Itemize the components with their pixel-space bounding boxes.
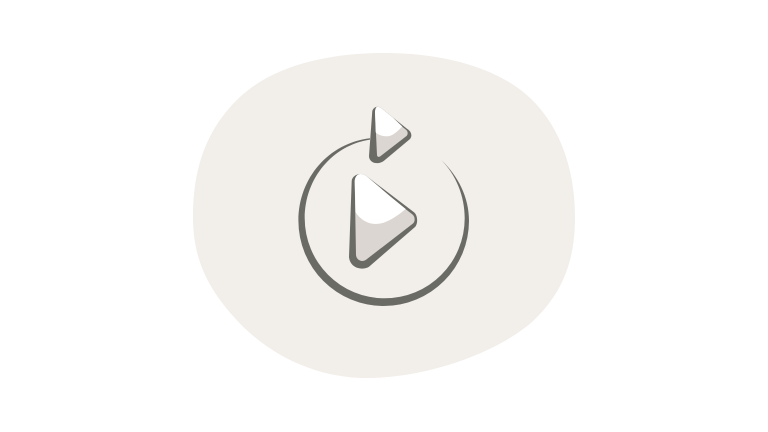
small triangle outline [369,107,411,163]
small triangle highlight [375,107,402,136]
large play triangle [349,174,417,269]
background blob [193,53,575,378]
large triangle highlight [355,174,406,224]
large triangle fill [355,176,415,261]
small triangle fill [375,108,408,157]
circular arrow ring [298,138,469,306]
large triangle outline [349,174,417,269]
small play triangle [369,107,411,163]
